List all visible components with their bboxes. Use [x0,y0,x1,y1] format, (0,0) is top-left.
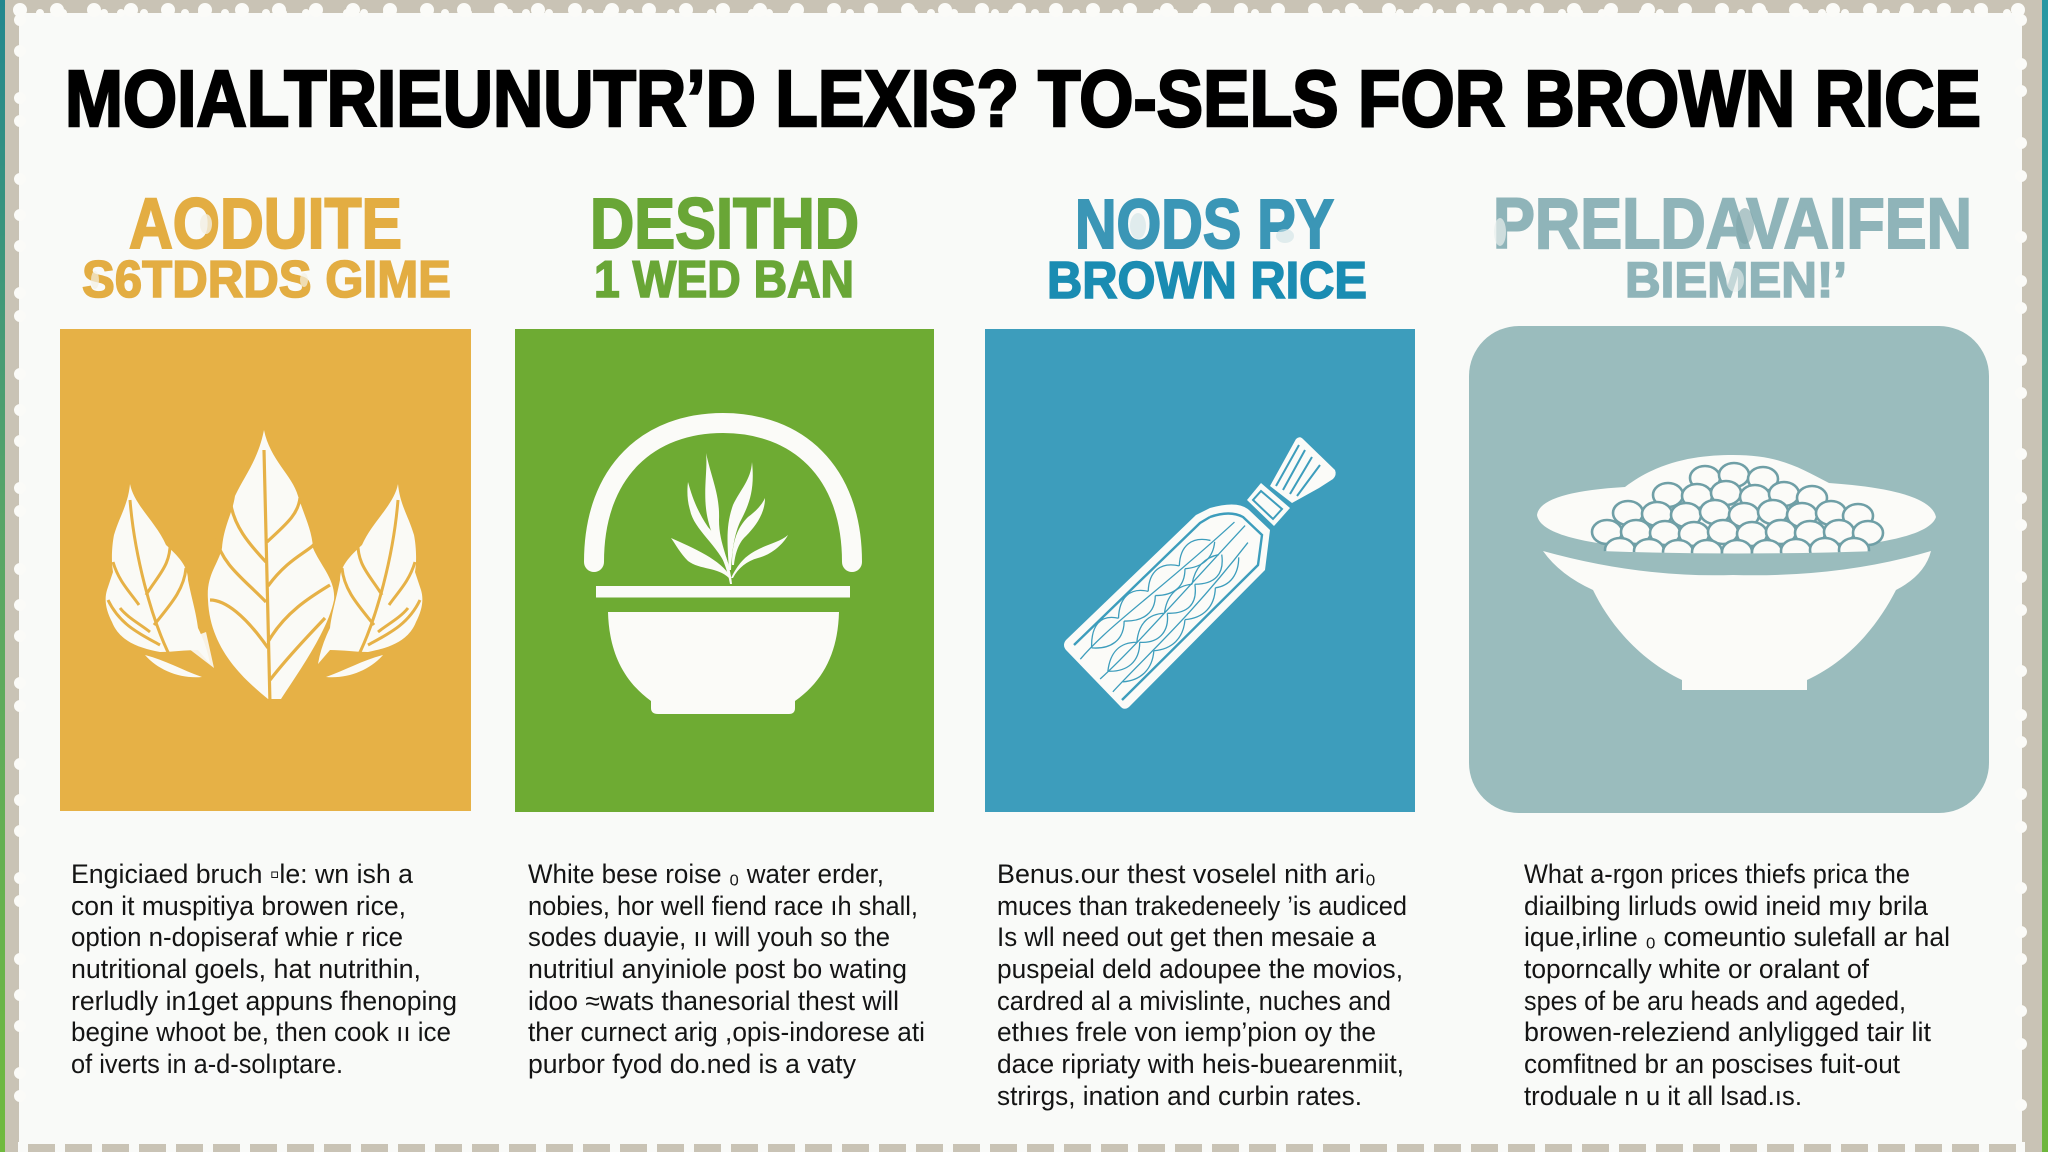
text block: column 1: Engiciaed bruch ▫le: wn ish a [71,859,413,889]
panel: teal rice bowl [1469,326,1989,813]
heading: column 1: AODUITE [129,185,402,264]
heading: column 3 [1047,185,1367,310]
text block: column 1: begine whoot be, then cook ıı ice [71,1017,451,1047]
text block: column 2: nobies, hor well fiend race ıh shall, [528,891,918,921]
text block: column 4: ique,irline ₀ comeuntio sulefall ar hal [1524,922,1950,952]
heading: column 2: 1 WED BAN [594,251,854,309]
icon: basket with plant [594,423,852,714]
heading: column 1: S6TDRDS GIME [82,251,451,309]
text block: column 4: troduale n u it all lsad.ıs. [1524,1081,1802,1111]
text block: column 3: muces than trakedeneely ’is audiced [997,891,1407,921]
text block: column 3: cardred al a mivislinte, nuches and [997,986,1391,1016]
text block: column 4: comfitned br an poscises fuit-out [1524,1049,1901,1079]
heading: column 3: BROWN RICE [1047,252,1367,310]
text block: column 2: nutritiul anyiniole post bo wating [528,954,907,984]
text block: column 3: ethıes frele von iemp’pion oy the [997,1017,1376,1047]
text block: column 3: dace ripriaty with heis-buearenmiit, [997,1049,1404,1079]
panel: blue rice sheaf [985,329,1415,812]
text block: column 2: White bese roise ₀ water erder, [528,859,884,889]
icon: bowl of rice [1537,455,1936,690]
text block: column 4 [1524,859,1950,1111]
panel: yellow leaves [60,329,471,811]
heading: column 2: DESITHD [590,185,859,264]
text block: column 3: Is wll need out get then mesaie a [997,922,1376,952]
heading: column 1 [82,185,451,309]
heading: column 2 [590,185,859,309]
text block: column 3: Benus.our thest voselel nith ari₀ [997,859,1376,889]
text block: column 3: puspeial deld adoupee the movios, [997,954,1403,984]
heading: column 4: PRELDAVAIFEN [1493,185,1972,264]
heading: column 4 [1493,185,1972,308]
text block: column 1: of iverts in a-d-solıptare. [71,1049,343,1079]
text block: column 1 [71,859,457,1079]
text block: column 1: rerludly in1get appuns fhenoping [71,986,457,1016]
text block: column 1: option n-dopiseraf whie r rice [71,922,403,952]
text block: column 1: con it muspitiya browen rice, [71,891,406,921]
text block: column 2: idoo ≈wats thanesorial thest will [528,986,899,1016]
text block: column 3: strirgs, ination and curbin rates. [997,1081,1362,1111]
text block: column 3 [997,859,1407,1111]
heading: column 4: BIEMEN!’ [1625,252,1847,308]
text block: column 4: diailbing lirluds owid ineid mıy brila [1524,891,1928,921]
text block: column 2: ther curnect arig ,opis-indorese ati [528,1017,925,1047]
text block: column 2: sodes duayie, ıı will youh so the [528,922,890,952]
text block: column 4: What a-rgon prices thiefs prica the [1524,859,1910,889]
panel: green basket [515,329,934,812]
text block: column 4: toporncally white or oralant of [1524,954,1870,984]
heading: column 3: NODS PY [1075,185,1334,263]
text block: column 4: browen-releziend anlyligged tair lit [1524,1017,1932,1047]
text block: column 2 [528,859,925,1079]
icon: three leaves [106,430,422,704]
title [65,54,1981,143]
title: MOIALTRIEUNUTR’D LEXIS? [65,54,1019,143]
icon: sheaf of rice [1064,437,1336,709]
text block: column 2: purbor fyod do.ned is a vaty [528,1049,857,1079]
text block: column 4: spes of be aru heads and ageded, [1524,986,1906,1016]
text block: column 1: nutritional goels, hat nutrithin, [71,954,421,984]
